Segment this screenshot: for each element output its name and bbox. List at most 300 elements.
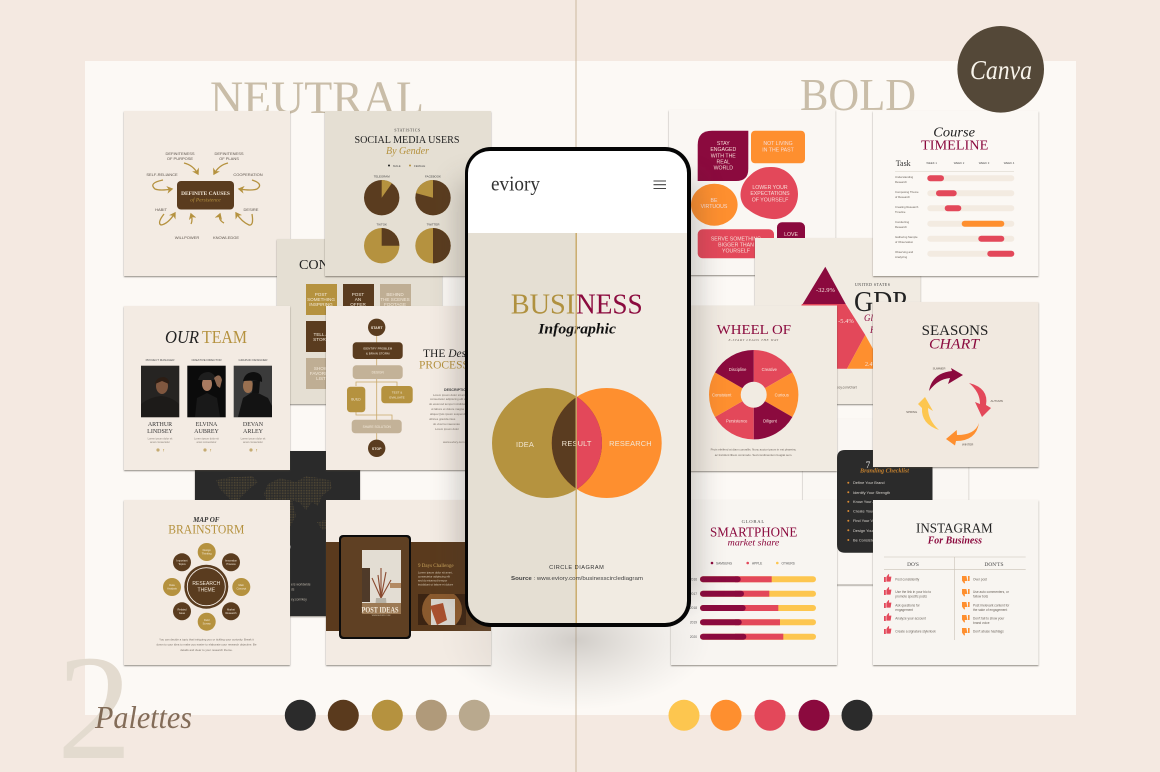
content tiles: SHOW [314,366,329,371]
timeline header: WEEK 1 [926,161,937,165]
dos list: Analyze your account [895,616,926,620]
maroon small box [777,222,805,258]
panel: post ideas [326,500,491,665]
phone shadow: side glow [458,180,698,600]
content tiles: STORY [313,337,329,342]
panel: design process [326,306,491,470]
venn diagram [492,388,662,498]
brainstorm caption: down to your idea to make you easier to elaborate your research objective. Be [157,642,257,646]
triangle chart: -5.4% [838,318,854,325]
team member: arthur: Lorem ipsum dolor sit [148,436,173,440]
venn diagram: RESULT [562,439,592,448]
team member: elvina [187,358,226,452]
dark checklist card: 7 [866,460,871,470]
brainstorm caption [157,638,257,652]
brainstorm caption: You can decide a topic that intriguing you or tickling your curiosity. Break it [159,638,254,642]
task labels: Timeline [895,210,906,214]
dark checklist card: Branding Checklist [859,468,909,475]
instagram heading: For Business [927,535,982,546]
bubble text: EXPECTATIONS [750,191,790,197]
content tiles: POST [315,292,327,297]
brainstorm diagram: RESEARCH [192,581,221,587]
tablet mockup [339,535,411,639]
tablet photo [362,550,401,614]
panel: bubble quotes [669,110,836,275]
brainstorm diagram: Related [178,608,187,612]
team member: arthur [141,358,179,452]
phone center line [576,233,577,623]
phone caption: CIRCLE DIAGRAM [549,565,604,571]
phone mockup [465,147,691,627]
timeline header: Task [896,159,911,168]
team member: elvina: ELVINA [196,422,218,428]
panel: instagram for business [873,500,1038,665]
instagram heading [916,521,993,546]
timeline header: WEEK 4 [1004,161,1015,165]
dark checklist card: Define Your Brand [853,480,885,485]
bubble text: BIGGER THAN [718,243,754,249]
dos list: promote specific posts [895,594,927,598]
brainstorm diagram: Process [226,562,236,566]
brainstorm diagram: Thinking [202,552,212,556]
flowchart: TEST & [392,390,402,394]
wheel caption: Proin eleifend at diam convallis. Nunc auctor ipsum in est pharetra, [711,448,797,452]
arrow: winter [946,423,979,446]
dos and donts table: DON'TS [985,562,1003,568]
process description: consectetur adipiscing elit sed [430,397,469,401]
process description: ut labore et dolore magna [431,407,464,411]
gdp source: ocy.com/chart [837,386,857,390]
task labels: Research [895,225,907,229]
wheel heading: 8-START LEADS THE WAY [729,338,779,342]
wheel chart: Creative [762,367,778,372]
content tiles: INSPIRING [309,302,333,307]
donts list [973,578,1010,634]
cause labels: WILLPOWER [175,235,199,240]
gdp heading: UNITED STATES [855,283,890,287]
canva badge [957,26,1044,113]
task labels: Observing and [895,250,914,254]
pie: telegram [364,174,399,215]
social legend [388,164,425,168]
bold palette swatches [668,700,872,731]
content tiles: THE SCENES [380,297,410,302]
process description: do eiusmod tempor incididunt [429,402,467,406]
panel: course timeline [873,111,1038,276]
brainstorm diagram: Main [238,583,245,587]
cause labels: HABIT [155,207,167,212]
bubble text: BE [711,198,718,204]
timeline header: WEEK 2 [954,161,965,165]
dark checklist card: Be Consistent [853,538,878,542]
wheel caption: ac tincidunt libero commodo. Sed condimentum feugiat sem. [715,453,792,457]
bubble text: STAY [717,141,730,147]
map caption: 9 [288,545,291,551]
brainstorm diagram: Field [204,618,210,622]
task labels: of Research [895,195,911,199]
cause labels: DEFINITENESS [214,151,244,156]
dark checklist card: Design Your Logo [853,528,884,533]
timeline header [895,159,1015,172]
dark checklist card: Create Your Message [853,508,890,514]
phone title: BUSI [511,288,575,320]
dotted world map [216,476,334,530]
team heading: OUR [165,327,199,347]
dos list: engagement [895,608,913,612]
challenge text [418,564,454,586]
brainstorm diagram: Analysis [167,586,178,590]
challenge text: incididunt ut labore et dolore [418,582,454,586]
donts list: Don't fail to show your [973,616,1005,620]
task labels: Conducting [895,220,910,224]
cause labels: DESIRE [244,207,259,212]
panel: social media users [325,111,491,276]
timeline heading: TIMELINE [921,138,988,153]
map caption [288,545,311,602]
pie: tiktok: TIKTOK [377,222,387,226]
panel: smartphone market share [671,500,837,665]
dos and donts table: DO'S [907,562,919,568]
brainstorm diagram: Survey [203,622,211,626]
stacked bar chart: 2018 [690,606,697,610]
bubble text: VIRTUOUS [701,204,728,210]
panel: wheel of [671,306,837,471]
inner panel [85,61,1076,715]
content tiles: SOMETHING [307,297,335,302]
smartphone heading: market share [728,537,779,547]
stacked bar chart: 2017 [690,592,697,596]
task labels: Understanding [895,175,914,179]
brainstorm diagram: Topics [178,562,186,566]
triangle chart: -32.9% [816,287,836,294]
pie: facebook: FACEBOOK [425,174,441,178]
team member: arthur: amet consectetur [150,440,170,444]
challenge text: 9 Days Challenge [418,564,454,569]
center box: DEFINITE CAUSES [181,191,230,197]
donts list: the sake of engagement [973,608,1007,612]
season labels: WINTER [962,443,973,447]
map caption: ds [291,588,295,592]
flowchart: IDENTIFY PROBLEM [363,346,393,350]
pie: twitter: TWITTER [427,222,439,226]
dos list: Create a signature style/look [895,630,936,634]
task labels: of Observation [895,240,914,244]
smartphone legend: OTHERS [782,561,795,565]
gdp heading [854,283,907,335]
challenge text: sed do eiusmod tempor [418,578,447,582]
cause arrows [153,163,260,225]
stacked bar chart: 2020 [690,635,697,639]
process description: www.eviory.com [443,440,465,444]
phone caption [511,565,644,582]
season labels: SUMMER [933,366,945,370]
thumbs down icons [962,576,970,636]
task labels: Research [895,180,907,184]
donts list: follow bots [973,594,988,598]
cause labels: KNOWLEDGE [213,235,239,240]
social heading: SOCIAL MEDIA USERS [354,134,460,146]
dark checklist card [837,450,932,553]
map caption: ers worldwide [291,582,311,586]
phone shadow: ground [441,570,711,710]
orange circle [691,184,738,226]
brainstorm diagram: Data [169,583,175,587]
team member: devan [234,358,272,452]
donts list: Don't abuse hashtags [973,630,1004,634]
brainstorm heading [168,516,244,536]
social legend: MALE [393,164,401,168]
brainstorm caption: details and clear to your research theme. [180,648,233,652]
team member: devan: ARLEY [243,429,264,435]
panel: gdp [755,238,920,404]
bubble text: WITH THE [711,153,736,159]
phone title: Infographic [537,321,616,337]
gdp heading: GDP [854,286,907,318]
bubble text: WORLD [714,166,733,172]
wheel caption [711,448,797,457]
process description: Lorem ipsum dolor sit amet [433,393,468,397]
team member: devan: amet consectetur [243,440,263,444]
stacked bar chart: 2016 [690,578,697,582]
flowchart: STOP [372,447,382,451]
gdp heading: Forecast [869,325,902,335]
arrow: spring [918,397,939,430]
bubble text: IN THE PAST [762,148,795,154]
brainstorm diagram: Research [225,611,237,615]
wheel heading: WHEEL OF [717,323,791,338]
team member: elvina: Lorem ipsum dolor sit [194,436,219,440]
team member: devan: Lorem ipsum dolor sit [241,436,266,440]
bubble text: YOURSELF [722,249,750,255]
heading: bold: BOLD [800,69,916,120]
season labels: AUTUMN [991,399,1003,403]
process description: aliqua Quis ipsum suspendisse [430,412,470,416]
content tiles: FOOTAGE [384,302,406,307]
dos list: Use the link in your bio to [895,590,931,594]
brainstorm diagram: Design [203,548,211,552]
phone title: NESS [576,288,643,320]
brainstorm diagram: Important [177,558,188,562]
pie: twitter [415,222,451,263]
content tiles: FAVORITE [310,371,332,376]
season labels: SPRING [906,410,918,414]
team member: devan: GRAPHIC DESIGNER [238,358,268,362]
dos list: Post consistently [895,578,920,582]
heading: neutral: NEUTRAL [210,72,424,124]
panel: content ideas [277,239,442,404]
team member: elvina: CREATIVE DIRECTOR [191,358,222,362]
social heading: STATISTICS [394,128,421,132]
seasons heading: SEASONS [922,323,988,339]
content tiles: TELL A [314,332,329,337]
smartphone heading: GLOBAL [742,519,765,524]
bubble text: OF YOURSELF [752,197,788,203]
maroon quote shape [698,131,748,181]
seasons heading: CHART [929,337,980,353]
bubble text: ENGAGED [710,147,737,153]
smartphone legend [711,561,795,565]
process heading: THE Design [423,348,481,360]
phone title [511,288,643,337]
center box: of Persistence [190,196,221,204]
process description: ultrices gravida risus [429,417,456,421]
content tiles: LIST [316,376,326,381]
triangle chart: 2.4% [865,362,878,368]
bubble text [701,141,798,255]
stacked bar chart [690,576,816,640]
bubble text: LOWER YOUR [752,185,788,191]
process heading [419,348,481,372]
donts list: Over post [973,578,987,582]
social legend: FEMALE [414,164,425,168]
pie: facebook [415,174,451,215]
challenge text: Lorem ipsum dolor sit amet, [418,570,453,574]
arrow: summer [929,368,963,391]
dos and donts table [884,557,1026,640]
task labels: Analyzing [895,255,908,259]
dos list [895,578,936,634]
team heading: TEAM [202,327,247,347]
wheel chart: Discipline [729,367,747,372]
process heading: PROCESS [419,360,469,372]
wheel chart [709,350,798,439]
team member: elvina: AUBREY [194,429,219,435]
phone caption: Source : www.eviory.com/businesscirclediagram [511,576,644,582]
gantt bars [927,175,1014,257]
bubble text: NOT LIVING [763,141,793,147]
process description: DESCRIPTION [444,388,469,392]
red blob [740,167,798,219]
timeline heading [921,126,988,153]
gantt tracks [927,175,1014,257]
venn diagram: RESEARCH [609,439,652,448]
timeline heading: Course [933,126,975,141]
center box [177,181,234,210]
team member: arthur: ARTHUR [148,422,172,428]
brainstorm diagram: Concept [236,586,246,590]
challenge text: consectetur adipiscing elit [418,574,450,578]
panel: definite causes diagram [124,111,290,276]
seasons heading [922,323,988,353]
thumbs up icons [884,574,891,634]
hamburger menu icon [654,181,666,188]
dark checklist card: Identify Your Strength [853,490,890,495]
smartphone legend: APPLE [752,561,762,565]
donts list: brand voice [973,621,990,625]
donts list: Post irrelevant content for [973,604,1010,608]
smartphone heading: SMARTPHONE [710,525,797,540]
phone frame [465,147,691,627]
orange quote box [751,131,805,163]
cause labels: OF PLANS [219,156,239,161]
brainstorm heading: MAP OF [192,516,220,524]
content tiles [306,284,411,389]
flowchart: START [371,326,383,330]
magazine photo [418,594,466,625]
brainstorm diagram [163,543,250,631]
team heading [165,327,247,347]
dark checklist card: Know Your Audience [853,499,889,504]
panel: world map [195,451,360,616]
phone screen [468,151,687,623]
process description [429,388,470,444]
team member: arthur: PROJECT MANAGER [146,358,174,362]
canva badge: Canva [970,55,1032,85]
arrow: autumn [969,383,991,417]
wheel chart: Persistence [726,418,748,424]
panel: map of brainstorm [124,500,290,665]
wheel chart: Curious [775,392,789,398]
flowchart: EVALUATE [389,396,405,400]
gdp heading: Global [864,313,890,323]
wheel chart: Consistent [712,392,732,398]
task labels [895,175,919,259]
venn diagram: IDEA [516,440,534,449]
content heading: CONTENT [299,258,365,273]
team member: devan: f [256,448,258,452]
tablet mockup: POST IDEAS [362,606,399,614]
panel: seasons chart [873,302,1038,467]
panel: our team [124,306,290,470]
cause labels: SELF-RELIANCE [146,172,178,177]
dark checklist card: Find Your Voice [853,518,880,523]
team member: elvina: f [210,448,212,452]
brainstorm diagram: Market [227,608,235,612]
brainstorm diagram: THEME [198,588,216,594]
pie: telegram: TELEGRAM [374,174,390,178]
donts list: Use auto commenters, or [973,590,1010,594]
brown band [326,542,491,631]
map caption: ey.com/key [291,598,307,602]
center divider line [576,0,577,772]
process description: do viverra maecenas [433,422,460,426]
team member: devan: DEVAN [243,422,264,428]
tablet mockup: WWW.EVIORY.COM [372,615,391,617]
phone logo: eviory [491,172,540,196]
triangle chart [770,267,884,369]
timeline header: WEEK 3 [979,161,990,165]
flowchart: SHARE SOLUTION [363,425,391,429]
instagram heading: INSTAGRAM [916,521,993,536]
team member: arthur: LINDSEY [147,429,173,435]
content tiles: BEHIND [386,292,404,297]
task labels: Composing Theme [895,190,919,194]
brainstorm diagram: Innovation [225,558,238,562]
team member: elvina: amet consectetur [197,440,217,444]
pie: tiktok [364,222,399,263]
content tiles: AN [355,297,361,302]
team member: arthur: f [163,448,165,452]
wheel chart: Diligent [763,418,778,424]
bubble text: SERVE SOMETHING [711,236,761,242]
bubble text: LOVE [784,232,798,238]
content tiles: POST [352,292,364,297]
flowchart: & BRAIN STORM [366,352,390,356]
task labels: Creating Research [895,205,919,209]
flowchart [347,319,413,457]
cause labels: DEFINITENESS [165,151,195,156]
brainstorm heading: BRAINSTORM [168,522,244,536]
task labels: Gathering Sample [895,235,918,239]
smartphone heading [710,519,797,547]
cause labels: OF PURPOSE [167,156,193,161]
neutral palette swatches [285,700,490,731]
panel: checklist backing [803,419,968,584]
brainstorm diagram: Issue [179,611,186,615]
red quote box [698,229,774,258]
palettes script label: Palettes [94,699,192,735]
smartphone legend: SAMSUNG [716,561,733,565]
